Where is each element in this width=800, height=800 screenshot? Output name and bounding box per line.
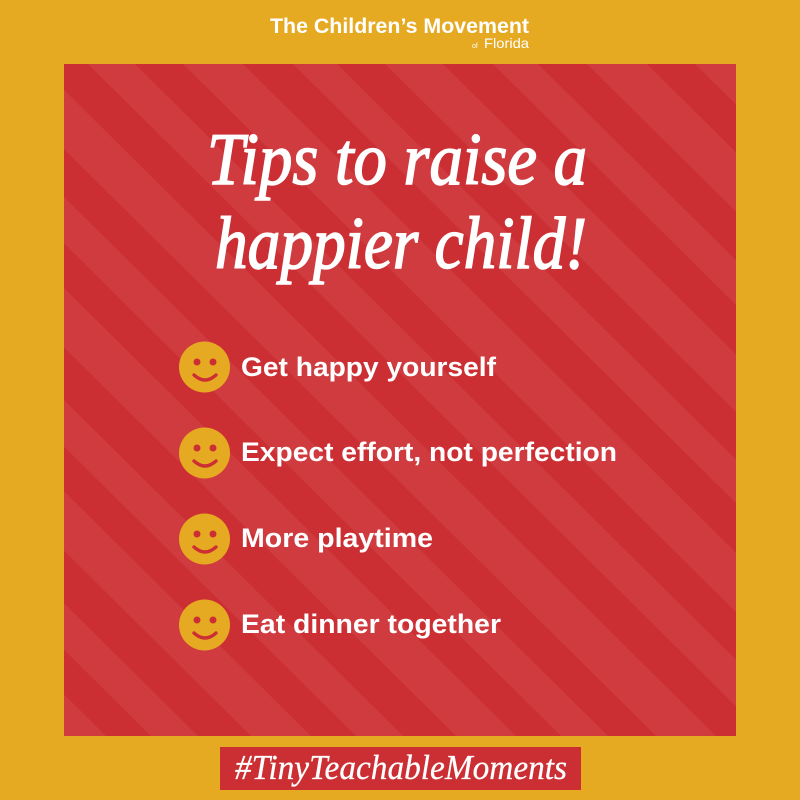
header: organisation logo [270,15,529,51]
title: Tips to raise a [207,119,587,201]
header: organisation logo: The Children’s Movement [270,15,529,38]
icon: smiley face [179,514,230,564]
icon: smiley face [179,428,230,478]
tip 3 [179,514,433,564]
tip 2 [179,428,617,478]
tip text: More playtime [241,523,433,553]
panel: striped red background [64,64,736,736]
tip 1 [179,342,497,392]
title: happier child! [215,203,587,285]
header: organisation logo: of [472,43,478,50]
icon: smiley face [179,342,230,392]
icon: smiley face [179,600,230,650]
title [207,119,587,285]
hashtag banner: #TinyTeachableMoments [235,748,567,787]
tip text: Eat dinner together [241,609,502,639]
header: organisation logo: Florida [484,35,529,51]
tip text: Expect effort, not perfection [241,437,617,467]
tip text: Get happy yourself [241,352,497,382]
tip 4 [179,600,502,650]
